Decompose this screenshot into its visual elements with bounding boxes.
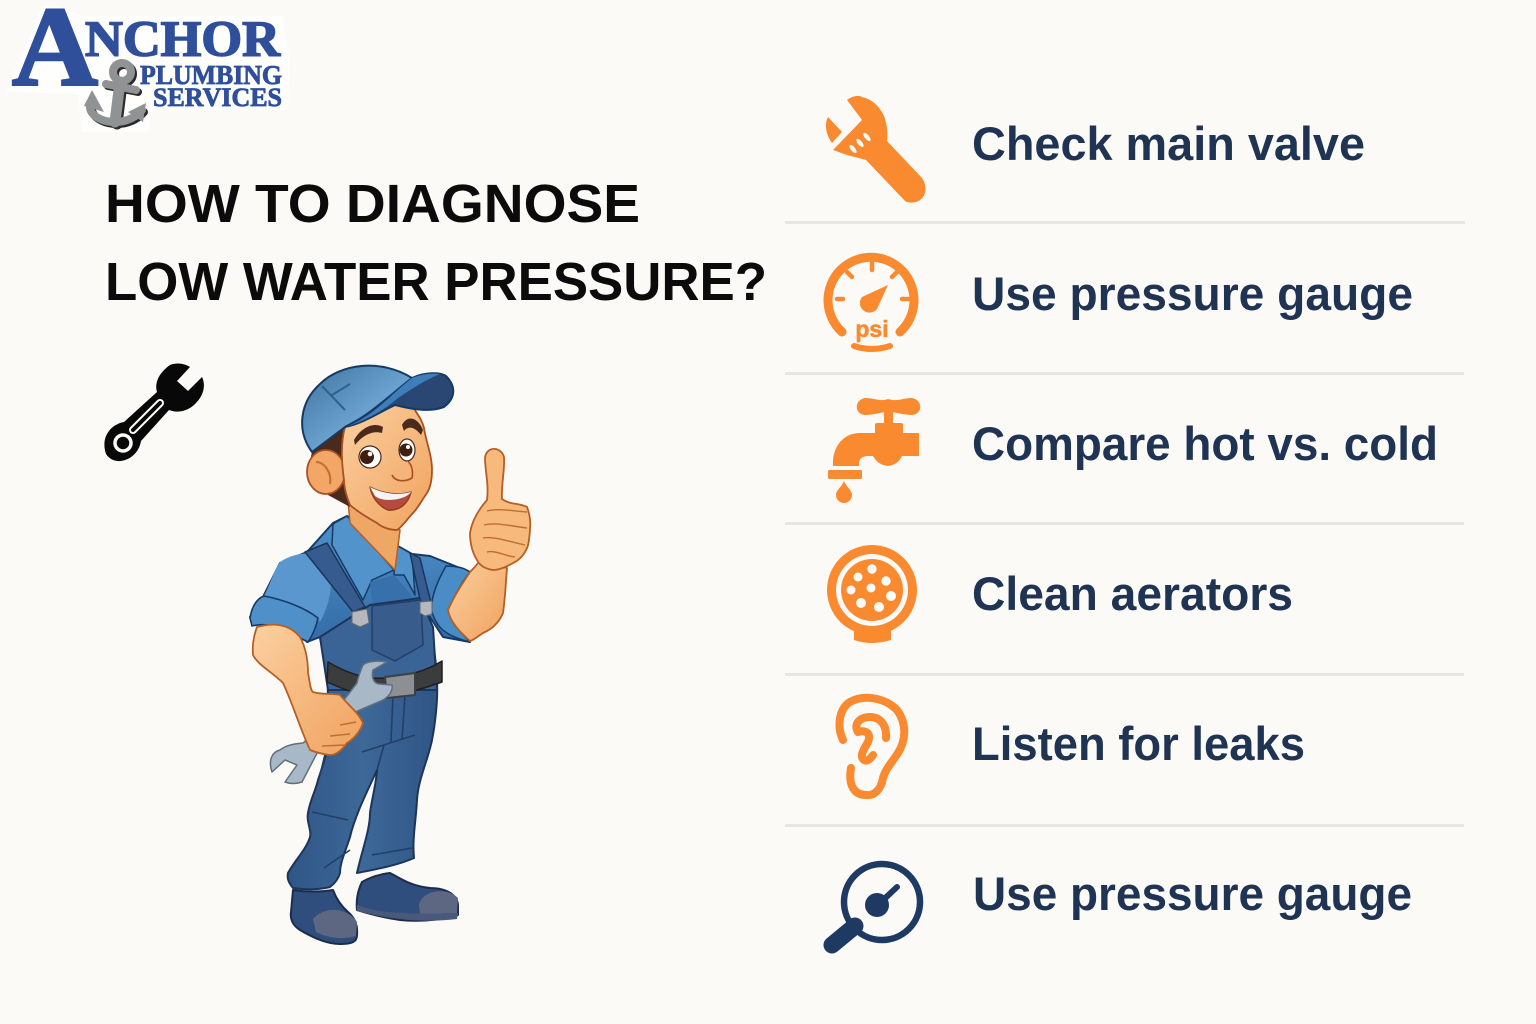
plumber: shirt <box>250 516 470 665</box>
row 6: Use pressure gauge <box>832 864 1412 945</box>
label: Clean aerators <box>972 567 1293 620</box>
logo: Anchor Plumbing Services <box>6 0 290 132</box>
title: LOW WATER PRESSURE? <box>105 252 767 312</box>
row 3: Compare hot vs. cold <box>828 398 1438 503</box>
title: HOW TO DIAGNOSE <box>105 174 640 234</box>
logo: Anchor Plumbing Services: SERVICES <box>153 83 282 112</box>
plumber: right forearm and thumbs-up hand <box>448 449 530 641</box>
row 4: Clean aerators <box>827 545 1293 643</box>
row 2: Use pressure gauge <box>828 257 1413 349</box>
icon: dripping faucet <box>828 398 920 503</box>
logo: Anchor Plumbing Services: NCHOR <box>85 12 281 68</box>
row 5: Listen for leaks <box>839 698 1305 795</box>
plumber: left arm and fist <box>253 625 363 755</box>
label: Compare hot vs. cold <box>972 417 1438 470</box>
plumber: overalls bib and straps <box>305 543 437 690</box>
divider lines between checklist rows <box>785 221 1465 827</box>
plumber: neck <box>348 500 400 570</box>
icon: aerator <box>827 545 917 643</box>
label: Use pressure gauge <box>972 267 1413 320</box>
illustration: plumber giving thumbs up <box>250 366 530 944</box>
plumber: hair and ear <box>307 372 430 507</box>
plumber: boots <box>291 873 458 944</box>
plumber: belt with buckle <box>327 661 442 698</box>
icon: navy magnifier gauge <box>832 864 920 945</box>
row 1: Check main valve <box>826 96 1365 203</box>
icon: orange adjustable wrench <box>826 96 926 203</box>
label: Listen for leaks <box>972 717 1305 770</box>
label: Check main valve <box>972 117 1365 170</box>
icon: anchor <box>84 63 146 124</box>
plumber: face <box>342 405 432 530</box>
logo: Anchor Plumbing Services: PLUMBING <box>140 60 282 90</box>
plumber: cap <box>302 366 453 452</box>
label: Use pressure gauge <box>973 867 1412 920</box>
icon: psi gauge: psi <box>855 316 889 342</box>
plumber: wrench lower head <box>270 712 340 784</box>
icon: ear <box>839 698 904 795</box>
icon: psi gauge <box>828 257 914 349</box>
title <box>105 174 767 312</box>
icon: black wrench <box>104 364 204 461</box>
plumber: trousers <box>288 680 437 889</box>
plumber: wrench upper head and shank <box>340 661 392 713</box>
